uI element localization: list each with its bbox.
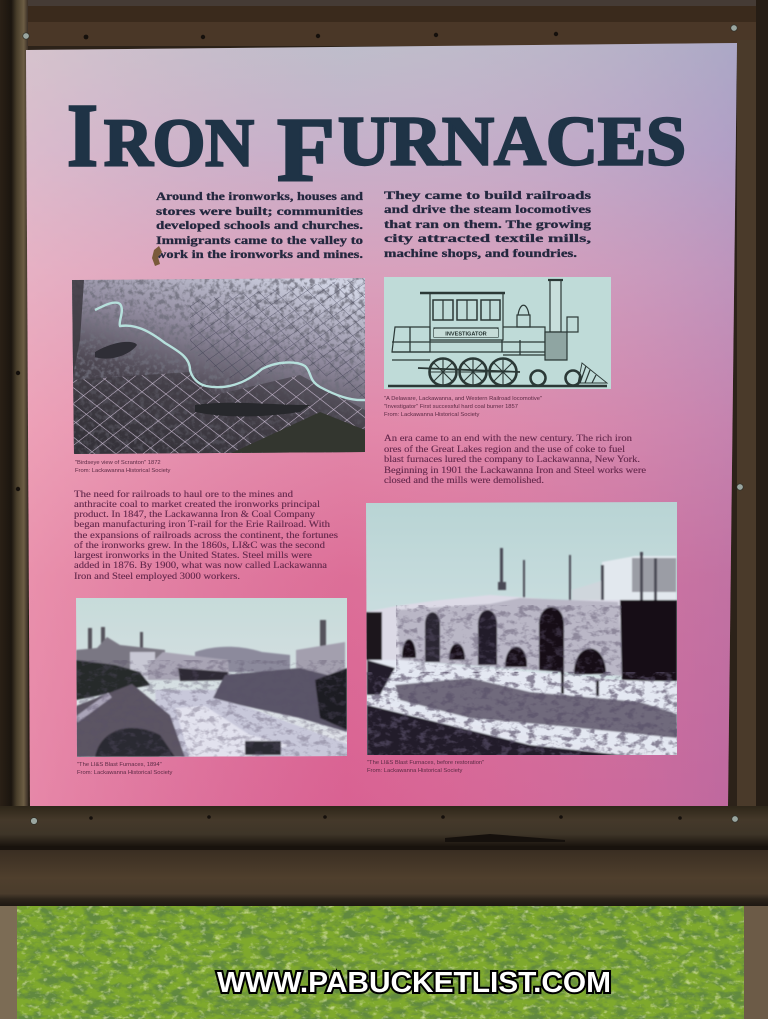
title: F [277,100,335,200]
caption: locomotive [384,396,542,418]
intro text right column: that ran on them. The growing [384,217,591,231]
paragraph: railroads and ironworks: added in 1876. By 1900, what was now called Lackawanna [74,560,327,570]
website watermark: WWW.PABUCKETLIST.COM [217,967,611,999]
illustration: locomotive [384,277,611,389]
intro text right column: city attracted textile mills, [384,231,591,245]
frame bolt holes [16,32,682,842]
caption: blast furnaces 1894 [77,762,172,776]
title: I [67,86,98,186]
paragraph: railroads and ironworks [74,489,338,581]
intro text left column: stores were built; communities [156,204,363,218]
mounting screws [23,25,743,824]
caption: Scranton view [75,460,170,474]
right support post [744,906,768,1019]
paragraph: end of an era [384,433,646,485]
intro text left column: work in the ironworks and mines. [156,247,363,261]
paragraph: end of an era: An era came to an end with the new century. The rich iron [384,433,632,443]
intro text right column: and drive the steam locomotives [384,202,591,216]
photo: bird's-eye map of Scranton [70,276,368,456]
intro text left column: developed schools and churches. [156,218,363,232]
caption: Scranton view: "Birdseye view of Scranton" 1872 [75,460,161,466]
sign panel [26,43,737,806]
intro text right column: machine shops, and foundries. [384,246,577,260]
paragraph: railroads and ironworks: began manufacturing iron T-rail for the Erie Railroad. With [74,519,330,529]
illustration: locomotive: INVESTIGATOR [445,332,487,338]
caption: Scranton view: From: Lackawanna Historical Society [75,468,170,474]
caption: before restoration: From: Lackawanna Historical Society [367,768,462,774]
rust chip on panel [152,246,162,266]
paragraph: railroads and ironworks: the expansions of railroads across the continent, the fortunes [74,530,338,540]
intro text left column: Around the ironworks, houses and [156,189,363,203]
paragraph: railroads and ironworks: largest ironworks in the United States. Steel mills were [74,550,312,560]
paragraph: end of an era: closed and the mills were demolished. [384,475,544,485]
caption: before restoration [367,760,484,774]
paragraph: railroads and ironworks: Iron and Steel employed 3000 workers. [74,571,240,581]
caption: locomotive: "Investigator" First successful hard coal burner 1857 [384,404,518,410]
caption: locomotive: "A Delaware, Lackawanna, and Western Railroad locomotive" [384,396,542,402]
photo: blast furnaces 1894 [74,596,350,760]
title [67,86,686,200]
caption: blast furnaces 1894: From: Lackawanna Historical Society [77,770,172,776]
caption: blast furnaces 1894: "The LI&S Blast Furnaces, 1894" [77,762,162,768]
paragraph: railroads and ironworks: of the ironworks grew. In the 1860s, LI&C was the second [74,540,325,550]
title: URNACES [338,104,686,180]
photo: blast furnaces before restoration [364,500,680,758]
paragraph: end of an era: ores of the Great Lakes region and the use of coke to fuel [384,444,625,454]
paragraph: railroads and ironworks: The need for railroads to haul ore to the mines and [74,489,293,499]
paragraph: end of an era: Beginning in 1901 the Lackawanna Iron and Steel works were [384,465,646,475]
caption: before restoration: "The LI&S Blast Furnaces, before restoration" [367,760,484,766]
intro text left column: Immigrants came to the valley to [156,233,363,247]
intro text left column [156,189,363,261]
paragraph: end of an era: blast furnaces lured the company to Lackawanna, New York. [384,454,640,464]
intro text right column: They came to build railroads [384,188,591,202]
paragraph: railroads and ironworks: product. In 1847, the Lackawanna Iron & Coal Company [74,509,315,519]
left support post [0,906,17,1019]
grass lawn [17,906,744,1019]
paragraph: railroads and ironworks: anthracite coal to market created the ironworks principal [74,499,321,509]
title: RON [104,104,254,180]
caption: locomotive: From: Lackawanna Historical Society [384,412,479,418]
intro text right column [384,188,591,260]
